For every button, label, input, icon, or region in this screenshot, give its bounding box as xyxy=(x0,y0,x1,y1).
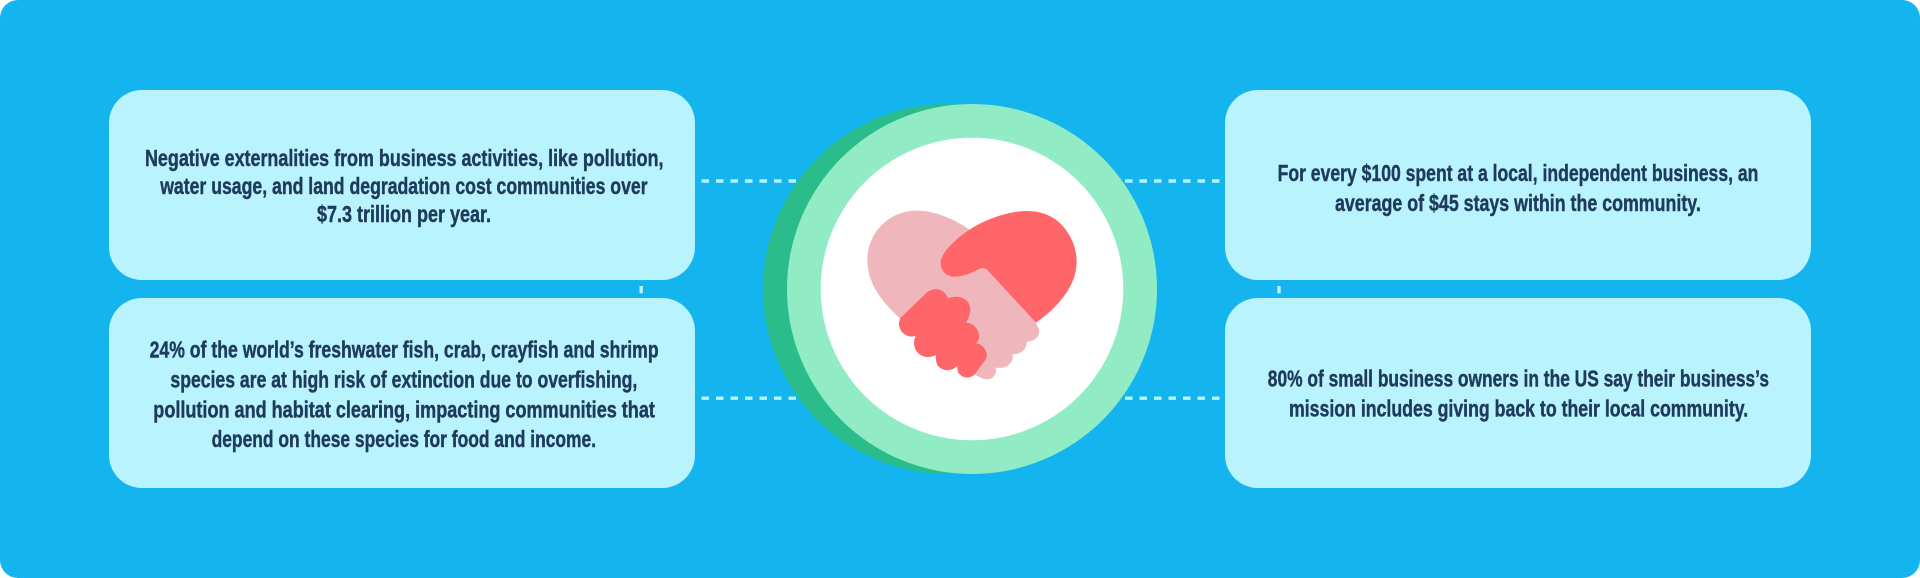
text: negative externalities statistic: Negative externalities from business activities, like pollution, xyxy=(145,145,664,171)
text: freshwater species statistic: depend on these species for food and income. xyxy=(212,426,596,452)
card background xyxy=(109,298,695,488)
icon: handshake forming a heart xyxy=(867,211,1077,379)
card background xyxy=(109,90,695,280)
text: small business owners statistic: mission includes giving back to their local community. xyxy=(1289,396,1748,422)
dark green offset circle xyxy=(763,104,1133,474)
text: negative externalities statistic: water usage, and land degradation cost communities over xyxy=(159,173,648,199)
white inner circle xyxy=(821,138,1123,440)
panel: local spending card xyxy=(1225,90,1811,280)
card background xyxy=(1225,90,1811,280)
pink hand xyxy=(867,211,1040,379)
card background xyxy=(1225,298,1811,488)
text: freshwater species statistic: species are at high risk of extinction due to overfishing, xyxy=(170,366,637,392)
text: local spending statistic xyxy=(1278,160,1758,216)
text: freshwater species statistic xyxy=(150,336,659,452)
coral hand: upper right xyxy=(941,211,1077,323)
light green ring xyxy=(787,104,1157,474)
panel: freshwater species card xyxy=(109,298,695,488)
panel: small business owners card xyxy=(1225,298,1811,488)
text: freshwater species statistic: pollution and habitat clearing, impacting communities that xyxy=(153,396,655,422)
coral hand: lower left fingers xyxy=(899,289,987,378)
text: small business owners statistic xyxy=(1268,366,1769,422)
text: local spending statistic: For every $100 spent at a local, independent business, an xyxy=(1278,160,1758,186)
text: local spending statistic: average of $45 stays within the community. xyxy=(1335,190,1701,216)
panel: negative externalities card xyxy=(109,90,695,280)
text: freshwater species statistic: 24% of the world’s freshwater fish, crab, crayfish and shrimp xyxy=(150,336,659,362)
connectors: dashed lines linking cards to the central circle xyxy=(641,181,1279,398)
central badge: concentric circles with handshake heart xyxy=(763,104,1157,474)
text: negative externalities statistic: $7.3 trillion per year. xyxy=(317,201,491,227)
text: negative externalities statistic xyxy=(145,145,664,227)
